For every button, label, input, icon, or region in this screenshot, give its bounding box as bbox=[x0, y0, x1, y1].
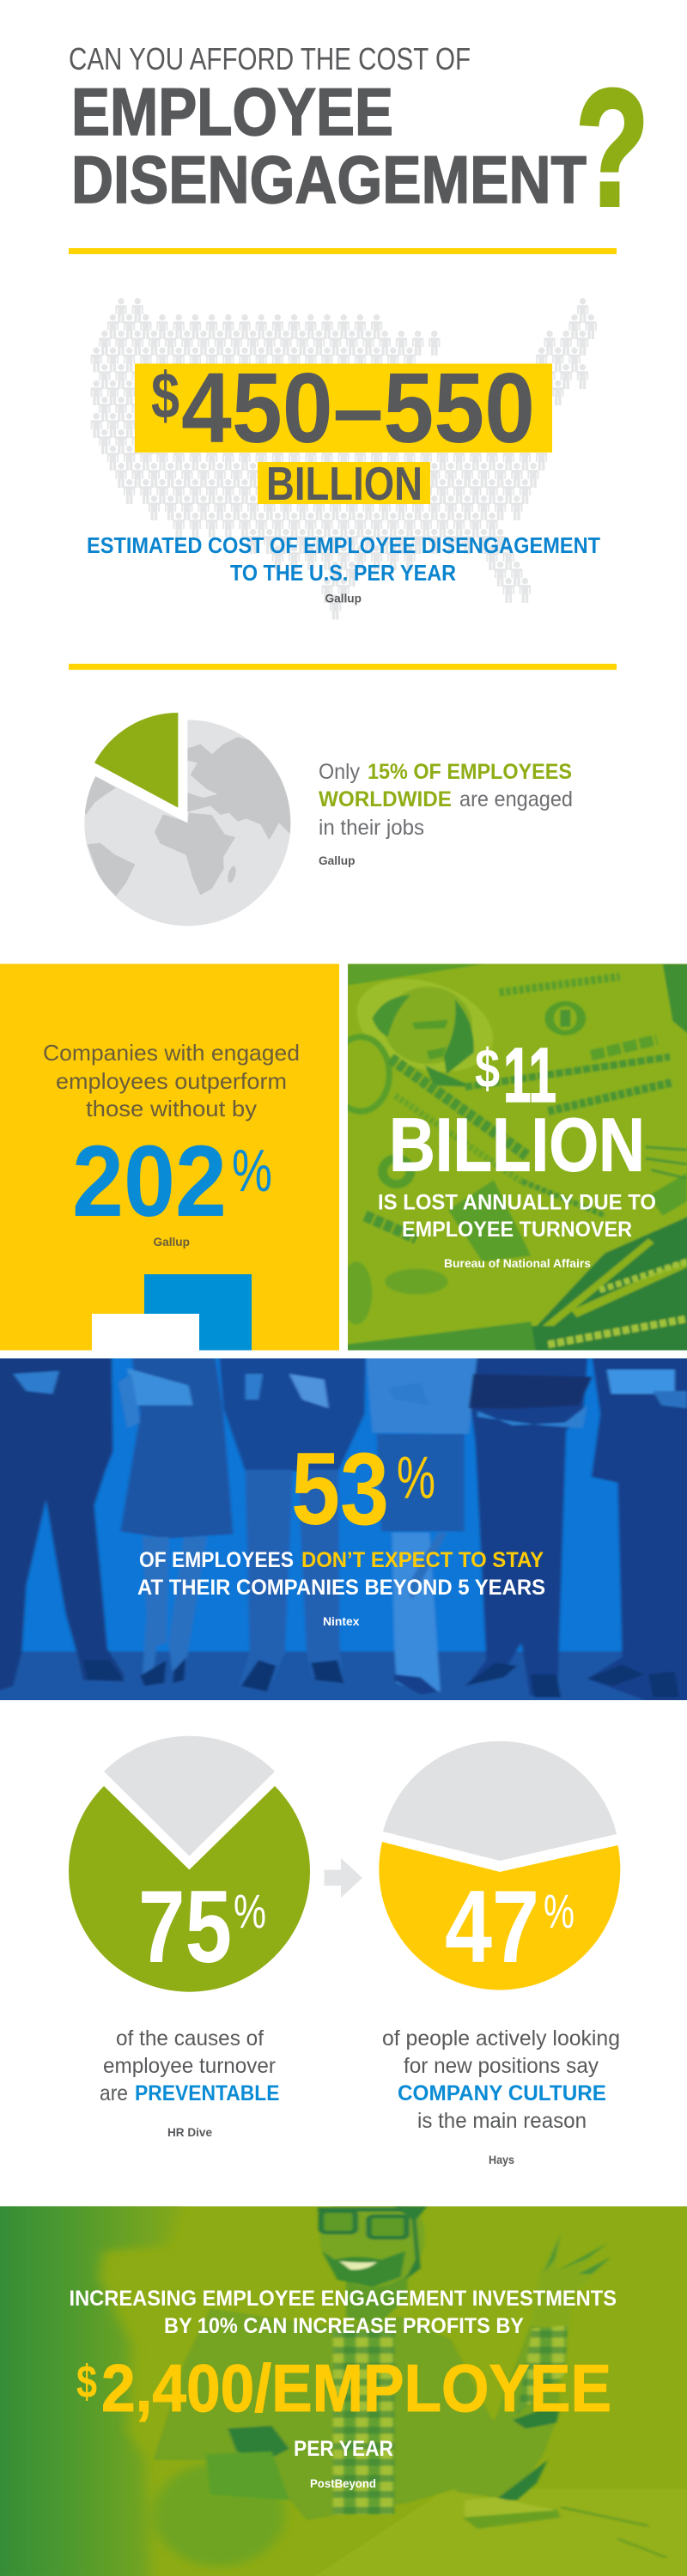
caption: ESTIMATED COST OF EMPLOYEE DISENGAGEMENT bbox=[87, 532, 600, 558]
stat: 2,400/EMPLOYEE bbox=[101, 2350, 611, 2426]
text block: for new positions say bbox=[404, 2054, 599, 2078]
caption bbox=[87, 532, 600, 605]
stat: % bbox=[232, 1137, 272, 1204]
text block: OF EMPLOYEES bbox=[139, 1548, 294, 1572]
pie chart 47%: 47 bbox=[445, 1869, 539, 1984]
pie chart 75%: % bbox=[234, 1884, 266, 1938]
text block: of people actively looking bbox=[382, 2026, 620, 2050]
text block: of the causes of bbox=[116, 2026, 264, 2050]
text block: COMPANY CULTURE bbox=[398, 2081, 606, 2105]
text block bbox=[100, 2026, 280, 2139]
text block: Hays bbox=[489, 2153, 514, 2166]
text block: EMPLOYEE TURNOVER bbox=[402, 1218, 632, 1242]
yellow divider bbox=[69, 664, 617, 670]
text block: Companies with engaged bbox=[43, 1040, 300, 1066]
text block: DON’T EXPECT TO STAY bbox=[301, 1548, 544, 1572]
text block: PREVENTABLE bbox=[135, 2081, 280, 2105]
text block: 15% OF EMPLOYEES bbox=[368, 760, 572, 784]
globe pie chart bbox=[71, 708, 292, 926]
pie chart 75% bbox=[69, 1736, 310, 1992]
text block: are engaged bbox=[459, 787, 573, 811]
amount box: $ bbox=[151, 360, 179, 433]
pie chart 47% bbox=[379, 1741, 620, 1990]
text block: WORLDWIDE bbox=[319, 787, 452, 811]
panel: 202% bbox=[0, 963, 339, 1350]
text block: AT THEIR COMPANIES BEYOND 5 YEARS bbox=[137, 1576, 545, 1600]
text block: INCREASING EMPLOYEE ENGAGEMENT INVESTMENTS bbox=[69, 2287, 617, 2311]
text block bbox=[294, 2437, 393, 2490]
text block: HR Dive bbox=[167, 2125, 212, 2139]
text block: in their jobs bbox=[319, 816, 424, 840]
panel: 47% company culture bbox=[379, 1741, 620, 2166]
text block: Only bbox=[319, 760, 360, 784]
stat: % bbox=[397, 1444, 435, 1511]
stat: $ bbox=[475, 1037, 500, 1099]
text block: IS LOST ANNUALLY DUE TO bbox=[378, 1190, 656, 1214]
text block bbox=[382, 2026, 620, 2166]
billion box: BILLION bbox=[266, 457, 423, 510]
text block: Gallup bbox=[319, 854, 356, 867]
stat: 11 bbox=[503, 1033, 556, 1119]
panel: $11 billion bbox=[332, 961, 687, 1358]
title: EMPLOYEE bbox=[71, 74, 393, 149]
title: CAN YOU AFFORD THE COST OF bbox=[69, 41, 471, 76]
text block: those without by bbox=[86, 1096, 257, 1121]
text block: BY 10% CAN INCREASE PROFITS BY bbox=[164, 2314, 524, 2338]
money photo bbox=[332, 961, 687, 1358]
text block: employee turnover bbox=[103, 2054, 276, 2078]
panel: 53% bbox=[0, 1354, 687, 1704]
source: Gallup bbox=[153, 1235, 190, 1249]
text block: PER YEAR bbox=[294, 2437, 393, 2461]
stat bbox=[389, 1033, 645, 1187]
text block: are bbox=[100, 2081, 128, 2105]
text block: Nintex bbox=[323, 1614, 360, 1628]
stat: BILLION bbox=[389, 1103, 645, 1187]
pie chart 47%: % bbox=[544, 1884, 575, 1938]
text block: employees outperform bbox=[56, 1068, 287, 1094]
text block bbox=[378, 1190, 656, 1270]
text block: PostBeyond bbox=[310, 2476, 376, 2490]
text block bbox=[43, 1040, 300, 1121]
text block: Bureau of National Affairs bbox=[444, 1256, 591, 1270]
meeting photo bbox=[0, 2187, 687, 2576]
arrow bbox=[325, 1858, 362, 1898]
map of the US made of people bbox=[88, 298, 599, 620]
stat: 53 bbox=[291, 1431, 389, 1546]
pie chart 75%: 75 bbox=[138, 1869, 232, 1984]
bar icon bbox=[92, 1274, 252, 1350]
panel: cost to the US bbox=[87, 298, 600, 620]
text block bbox=[319, 760, 573, 867]
stat: $ bbox=[76, 2356, 97, 2408]
title bbox=[69, 41, 649, 241]
text block bbox=[137, 1548, 545, 1628]
caption: TO THE U.S. PER YEAR bbox=[230, 560, 456, 586]
title: ? bbox=[575, 55, 649, 241]
panel: profits per employee bbox=[0, 2187, 687, 2576]
title: DISENGAGEMENT bbox=[71, 142, 587, 217]
text block bbox=[69, 2287, 617, 2338]
panel: 15% worldwide bbox=[71, 708, 573, 926]
caption: Gallup bbox=[325, 591, 362, 605]
panel: 75% preventable bbox=[69, 1736, 310, 2139]
amount box: 450–550 bbox=[181, 352, 535, 464]
yellow divider bbox=[69, 248, 617, 254]
text block: is the main reason bbox=[417, 2109, 587, 2133]
stat: 202 bbox=[72, 1125, 227, 1238]
people photo bbox=[0, 1354, 687, 1704]
